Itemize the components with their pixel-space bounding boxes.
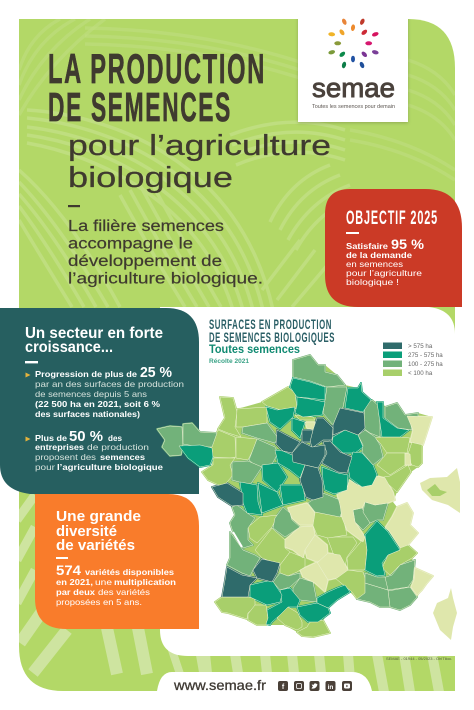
- main title: LA PRODUCTION: [48, 45, 266, 92]
- orange text: 574: [56, 562, 81, 578]
- intro text: l’agriculture biologique.: [68, 270, 263, 288]
- logo wordmark: semae: [312, 73, 395, 103]
- bullet two: l’agriculture biologique: [57, 462, 163, 472]
- footer band: [0, 672, 474, 710]
- bullet two: Plus de: [35, 433, 67, 443]
- panel: teal sector growth: [0, 308, 199, 494]
- map legend: [383, 342, 443, 377]
- teal heading: croissance...: [25, 339, 113, 356]
- objectif text: de la demande: [346, 250, 412, 260]
- orange heading: diversité: [56, 523, 117, 540]
- bullet two: proposent des: [35, 452, 96, 462]
- intro text: [68, 218, 263, 288]
- estuary: [233, 532, 242, 547]
- bullet one: (22 500 ha en 2021, soit 6 %: [35, 399, 160, 409]
- orange text: en 2021,: [56, 577, 93, 587]
- bullet two: pour: [35, 462, 55, 472]
- intro text: La filière semences: [68, 218, 224, 235]
- logo tagline: Toutes les semences pour demain: [312, 104, 395, 110]
- objectif text: 95 %: [391, 236, 425, 252]
- bullet one: des surfaces nationales): [35, 409, 140, 419]
- bullet one: de semences depuis 5 ans: [35, 389, 147, 399]
- bullet two: des: [108, 433, 122, 443]
- objectif text: [346, 236, 425, 287]
- credit line: SEMAE - 01944 - 05/2023 - Oh!Tiloo.: [386, 657, 452, 661]
- Paris inset: [420, 468, 460, 513]
- main title: [48, 45, 266, 130]
- orange heading: de variétés: [56, 537, 135, 554]
- orange text: variétés disponibles: [85, 567, 174, 577]
- map heading: Récolte 2021: [209, 358, 249, 365]
- bullet two: de production: [87, 442, 149, 452]
- teal heading: Un secteur en forte: [25, 325, 163, 342]
- orange text: multiplication: [114, 577, 176, 587]
- main title: DE SEMENCES: [48, 84, 232, 130]
- subtitle: [68, 130, 331, 194]
- orange text: des variétés: [98, 587, 150, 597]
- logo card: [290, 0, 420, 122]
- bullet one: 25 %: [140, 364, 172, 381]
- orange text: par deux: [56, 587, 95, 597]
- dash: [68, 205, 80, 207]
- bullet two: 50 %: [69, 428, 103, 445]
- objectif text: Satisfaire: [346, 241, 388, 251]
- map heading: SURFACES EN PRODUCTION: [209, 316, 332, 332]
- objectif text: biologique !: [346, 277, 399, 287]
- subtitle: pour l’agriculture: [68, 130, 331, 162]
- objectif text: en semences: [346, 259, 403, 269]
- panel: orange varieties: [35, 494, 199, 629]
- orange text: une: [95, 577, 112, 587]
- intro text: développement de: [68, 253, 222, 270]
- orange text: proposées en 5 ans.: [56, 597, 142, 607]
- map legend: > 575 ha: [408, 343, 433, 350]
- social icons: in: [328, 684, 333, 691]
- teal heading: [25, 325, 163, 356]
- white map area: [160, 307, 455, 656]
- map of France: [157, 355, 460, 640]
- intro text: accompagne le: [68, 236, 193, 252]
- map heading: Toutes semences: [209, 342, 300, 356]
- bullet one: [26, 364, 184, 419]
- bullet one: par an des surfaces de production: [35, 379, 184, 389]
- subtitle: biologique: [68, 162, 233, 194]
- map heading: DE SEMENCES BIOLOGIQUES: [209, 329, 335, 345]
- objectif text: pour l’agriculture: [346, 268, 422, 278]
- logo petals: [328, 18, 379, 69]
- map legend: 100 - 275 ha: [408, 361, 443, 368]
- map legend: < 100 ha: [408, 370, 433, 377]
- bullet two: semences: [100, 452, 145, 462]
- orange heading: [56, 508, 141, 554]
- social icons: f: [282, 684, 285, 691]
- bullet two: entreprises: [35, 442, 84, 452]
- social icons: [278, 681, 352, 691]
- bullet two: [26, 428, 163, 472]
- Corsica: [433, 588, 457, 640]
- website: www.semae.fr: [173, 677, 266, 693]
- map legend: 275 - 575 ha: [408, 352, 443, 359]
- bullet one: Progression de plus de: [35, 369, 137, 379]
- orange heading: Une grande: [56, 508, 141, 525]
- map heading: [209, 316, 335, 365]
- orange text: [56, 562, 176, 607]
- panel: objectif 2025: [325, 189, 462, 307]
